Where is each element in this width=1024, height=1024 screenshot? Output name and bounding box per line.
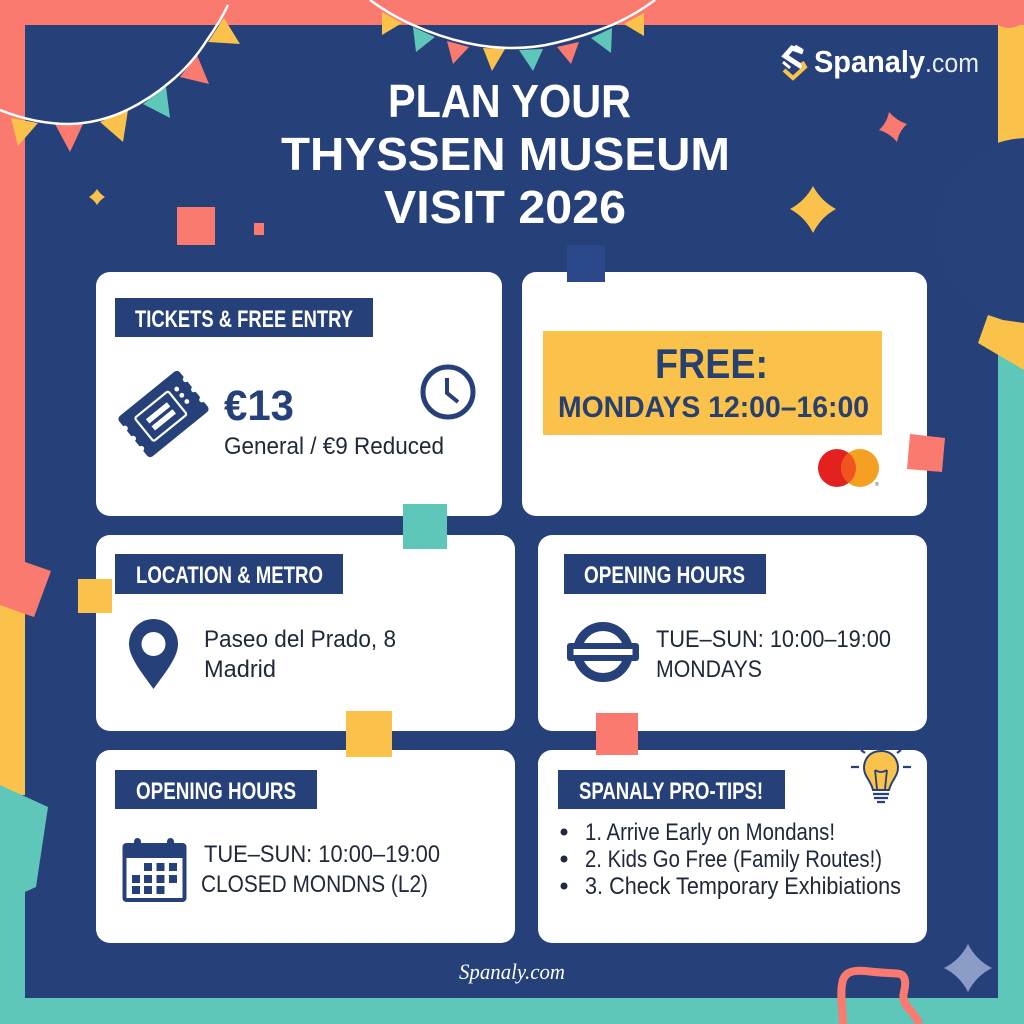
heading: location — [115, 554, 343, 594]
heading: opening hours: OPENING HOURS — [136, 778, 296, 805]
icon: metro roundel — [567, 626, 639, 678]
hours text — [656, 626, 891, 683]
panel: opening hours metro — [538, 535, 927, 731]
sparkle: yellow large — [790, 186, 836, 233]
heading: opening hours — [564, 554, 766, 594]
sparkle: yellow small — [89, 189, 105, 205]
decorative yellow square — [346, 711, 392, 757]
hours text: MONDAYS — [656, 656, 762, 683]
hours text: TUE–SUN: 10:00–19:00 — [204, 841, 440, 868]
price: €13 — [224, 382, 294, 430]
decorative tilted coral square — [907, 434, 945, 472]
logo: Spanaly.com: .com — [925, 48, 979, 78]
logo: Spanaly.com: Spanaly — [814, 44, 926, 79]
panel: pro tips — [538, 740, 927, 943]
decorative squiggle — [841, 971, 920, 1024]
highlight box: MONDAYS 12:00–16:00 — [558, 391, 869, 424]
sparkle: coral — [879, 112, 907, 142]
address: Paseo del Prado, 8 — [204, 626, 396, 653]
sparkle: pale blue — [944, 944, 992, 992]
title: THYSSEN MUSEUM — [281, 128, 730, 180]
icon: clock — [423, 367, 473, 417]
icon: card logo — [818, 449, 879, 488]
bunting: top garland — [370, 0, 655, 71]
decorative teal square — [403, 504, 447, 549]
tips list: 1. Arrive Early on Mondans! — [585, 819, 835, 846]
tips list: 2. Kids Go Free (Family Routes!) — [585, 846, 882, 873]
price detail: General / €9 Reduced — [224, 433, 444, 460]
title: PLAN YOUR — [388, 75, 631, 127]
panel: free entry callout — [522, 272, 927, 516]
tips list — [560, 819, 901, 900]
address — [204, 626, 396, 683]
icon: ticket — [115, 367, 212, 461]
panel: location and metro — [96, 535, 515, 731]
decorative yellow square — [78, 579, 112, 613]
icon: light bulb — [851, 740, 911, 802]
footer signature: Spanaly.com — [459, 959, 565, 984]
icon: map pin — [129, 619, 178, 689]
hours text — [201, 841, 440, 898]
title: VISIT 2026 — [384, 181, 626, 233]
panel: opening hours calendar — [96, 750, 515, 943]
heading: opening hours — [115, 770, 317, 809]
decorative navy square — [567, 245, 605, 282]
heading: pro tips — [558, 770, 785, 809]
icon: card logo: ® — [875, 481, 879, 488]
logo: Spanaly.com — [783, 44, 979, 79]
heading: tickets — [115, 298, 373, 337]
highlight box — [543, 331, 882, 435]
highlight box: FREE: — [655, 340, 768, 387]
decorative coral square — [177, 207, 215, 245]
address: Madrid — [204, 656, 276, 683]
icon: calendar — [122, 838, 186, 902]
tips list: 3. Check Temporary Exhibiations — [585, 873, 901, 900]
title — [281, 75, 730, 233]
decorative small coral square — [254, 223, 264, 235]
panel: tickets and free entry — [96, 272, 502, 516]
heading: location: LOCATION & METRO — [136, 562, 323, 589]
heading: opening hours: OPENING HOURS — [584, 562, 745, 589]
bunting: left garland — [0, 5, 240, 152]
heading: pro tips: SPANALY PRO-TIPS! — [579, 778, 763, 805]
decorative coral square — [596, 713, 638, 755]
hours text: TUE–SUN: 10:00–19:00 — [656, 626, 891, 653]
hours text: CLOSED MONDNS (L2) — [201, 871, 428, 898]
heading: tickets: TICKETS & FREE ENTRY — [135, 306, 353, 333]
